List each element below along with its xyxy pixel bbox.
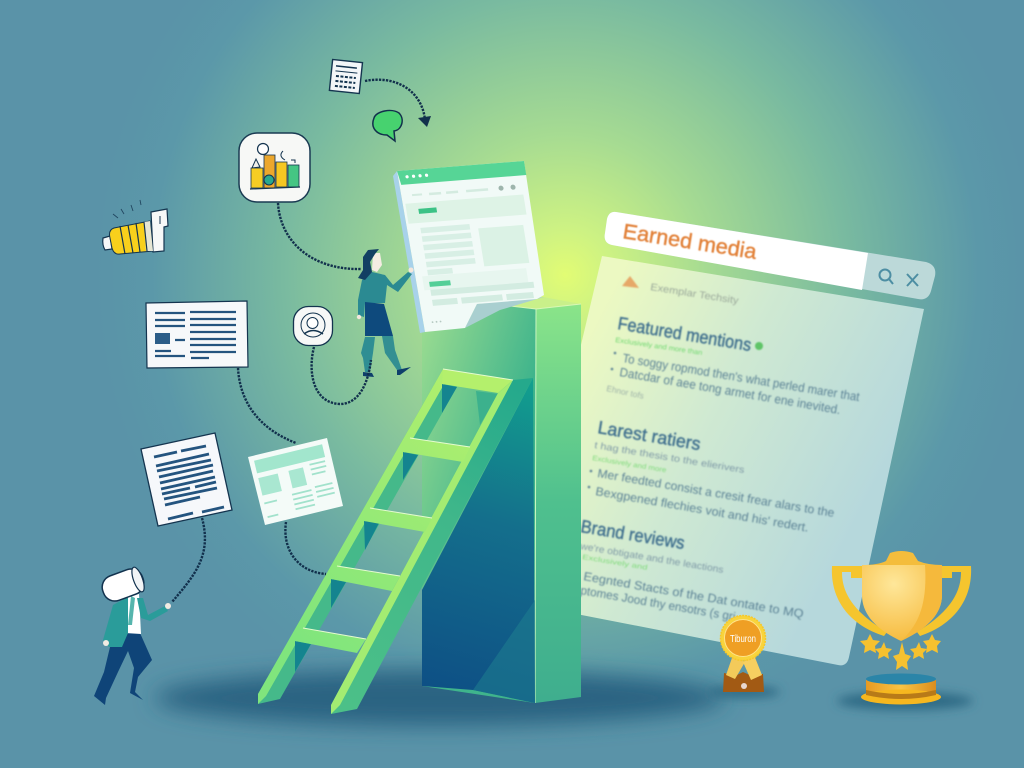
medal (708, 616, 780, 698)
body text: Eegnted Stacts of the Dat ontate to MQ (582, 569, 805, 621)
ladder shadow on pillar (422, 378, 535, 703)
document: tilted (141, 433, 232, 526)
shirt (125, 594, 141, 634)
subheading: t hag the thesis to the elierivers (594, 440, 746, 476)
icon: circular badge (294, 306, 332, 346)
window dots (405, 174, 428, 179)
ground shadow (155, 670, 725, 726)
icon: search (880, 270, 893, 284)
document: top left (146, 301, 248, 368)
icon: warning triangle (622, 276, 639, 288)
search bar (605, 212, 935, 299)
left rail (258, 369, 457, 704)
icon: close (907, 274, 918, 286)
page dots (432, 321, 442, 323)
connector: calendar to arrow (365, 80, 425, 120)
page layout (397, 161, 549, 324)
page edge (393, 171, 425, 333)
right rail (331, 378, 533, 714)
lighter wedge at shadow foot (473, 600, 535, 703)
heading: earned media: Earned media (621, 220, 758, 264)
person: woman (357, 249, 414, 377)
torso and arms (358, 272, 412, 317)
nav icons (498, 184, 516, 191)
hand (408, 268, 414, 272)
stars (860, 634, 941, 670)
mini webpage (248, 438, 343, 525)
pillar left face (422, 296, 536, 703)
meta line: Exclusively and (582, 554, 648, 572)
top rung (442, 369, 513, 393)
pillar (422, 296, 581, 703)
handles (832, 566, 971, 636)
ladder (258, 369, 533, 714)
trophy shadow (837, 692, 973, 710)
connector: circle icon to foot (312, 347, 371, 404)
icon: arrow head (418, 116, 431, 127)
nav (412, 188, 488, 197)
trousers (94, 633, 152, 705)
icon: chat bubble (373, 111, 402, 141)
icon: calendar (329, 60, 362, 93)
heading: featured mentions: Featured mentions (616, 313, 753, 355)
cup (862, 565, 942, 641)
text lines (420, 224, 477, 275)
meta line: Exclusively and more (592, 455, 667, 474)
subheading: we're obtigate and the leactions (578, 541, 725, 576)
green tag (429, 280, 451, 287)
page curl (465, 297, 544, 328)
rung shadows (295, 384, 498, 672)
skirt (365, 302, 393, 336)
jacket (103, 597, 128, 647)
lower band (422, 268, 528, 290)
ribbons (726, 655, 745, 679)
body text: ptomes Jood thy ensotrs (s gri (579, 583, 737, 624)
icon: bulb (103, 200, 168, 254)
lower lines (430, 282, 536, 306)
hero band (405, 194, 527, 224)
heading: latest ratings: Larest ratiers (596, 417, 702, 454)
medal shadow (708, 686, 780, 698)
green tag (418, 207, 437, 214)
bullet list: Bexgpened flechies voit and his' redert. (594, 484, 810, 535)
front leg (382, 336, 402, 370)
hands (165, 603, 171, 609)
face (372, 253, 382, 272)
small note: Ehnor tofs (606, 383, 645, 401)
trophy (832, 551, 973, 710)
trophy base (866, 680, 936, 697)
medal label: Tiburon (730, 634, 756, 645)
medal emblem (741, 683, 747, 689)
browser page on pillar (393, 161, 549, 333)
back leg (361, 337, 375, 372)
status dot (755, 342, 763, 350)
hair (358, 249, 379, 280)
cup rim (862, 551, 942, 572)
heading: brand reviews: Brand reviews (579, 516, 686, 553)
shoes (363, 367, 411, 377)
connector: chart to woman (278, 203, 361, 269)
panel: earned media (520, 212, 935, 665)
medal stand (723, 672, 764, 692)
person: man with cylinder head (94, 566, 171, 705)
connector: mini page to ladder (285, 522, 326, 574)
connector: document to mini page (238, 368, 296, 443)
pillar top (490, 297, 581, 310)
bullet list: To soggy ropmod then's what perled marer that (622, 351, 861, 404)
icon: chart badge (239, 133, 310, 202)
source line: Exemplar Techsity (650, 282, 739, 307)
panel text content (578, 276, 861, 624)
pillar right face (535, 304, 581, 703)
rungs (295, 438, 470, 653)
image block (478, 225, 529, 266)
bullet list: Datcdar of aee tong armet for ene inevited. (618, 365, 842, 417)
header bar (397, 161, 526, 185)
medal disc (720, 616, 766, 660)
page sheet (397, 161, 544, 332)
meta line: Exclusively and more than (615, 337, 703, 357)
connector: document to hand (172, 518, 205, 602)
dotted connectors (172, 80, 425, 602)
bullet list: Mer feedted consist a cresit frear alars to the (596, 466, 836, 520)
panel sheet (520, 256, 924, 665)
cylinder head (99, 566, 147, 604)
